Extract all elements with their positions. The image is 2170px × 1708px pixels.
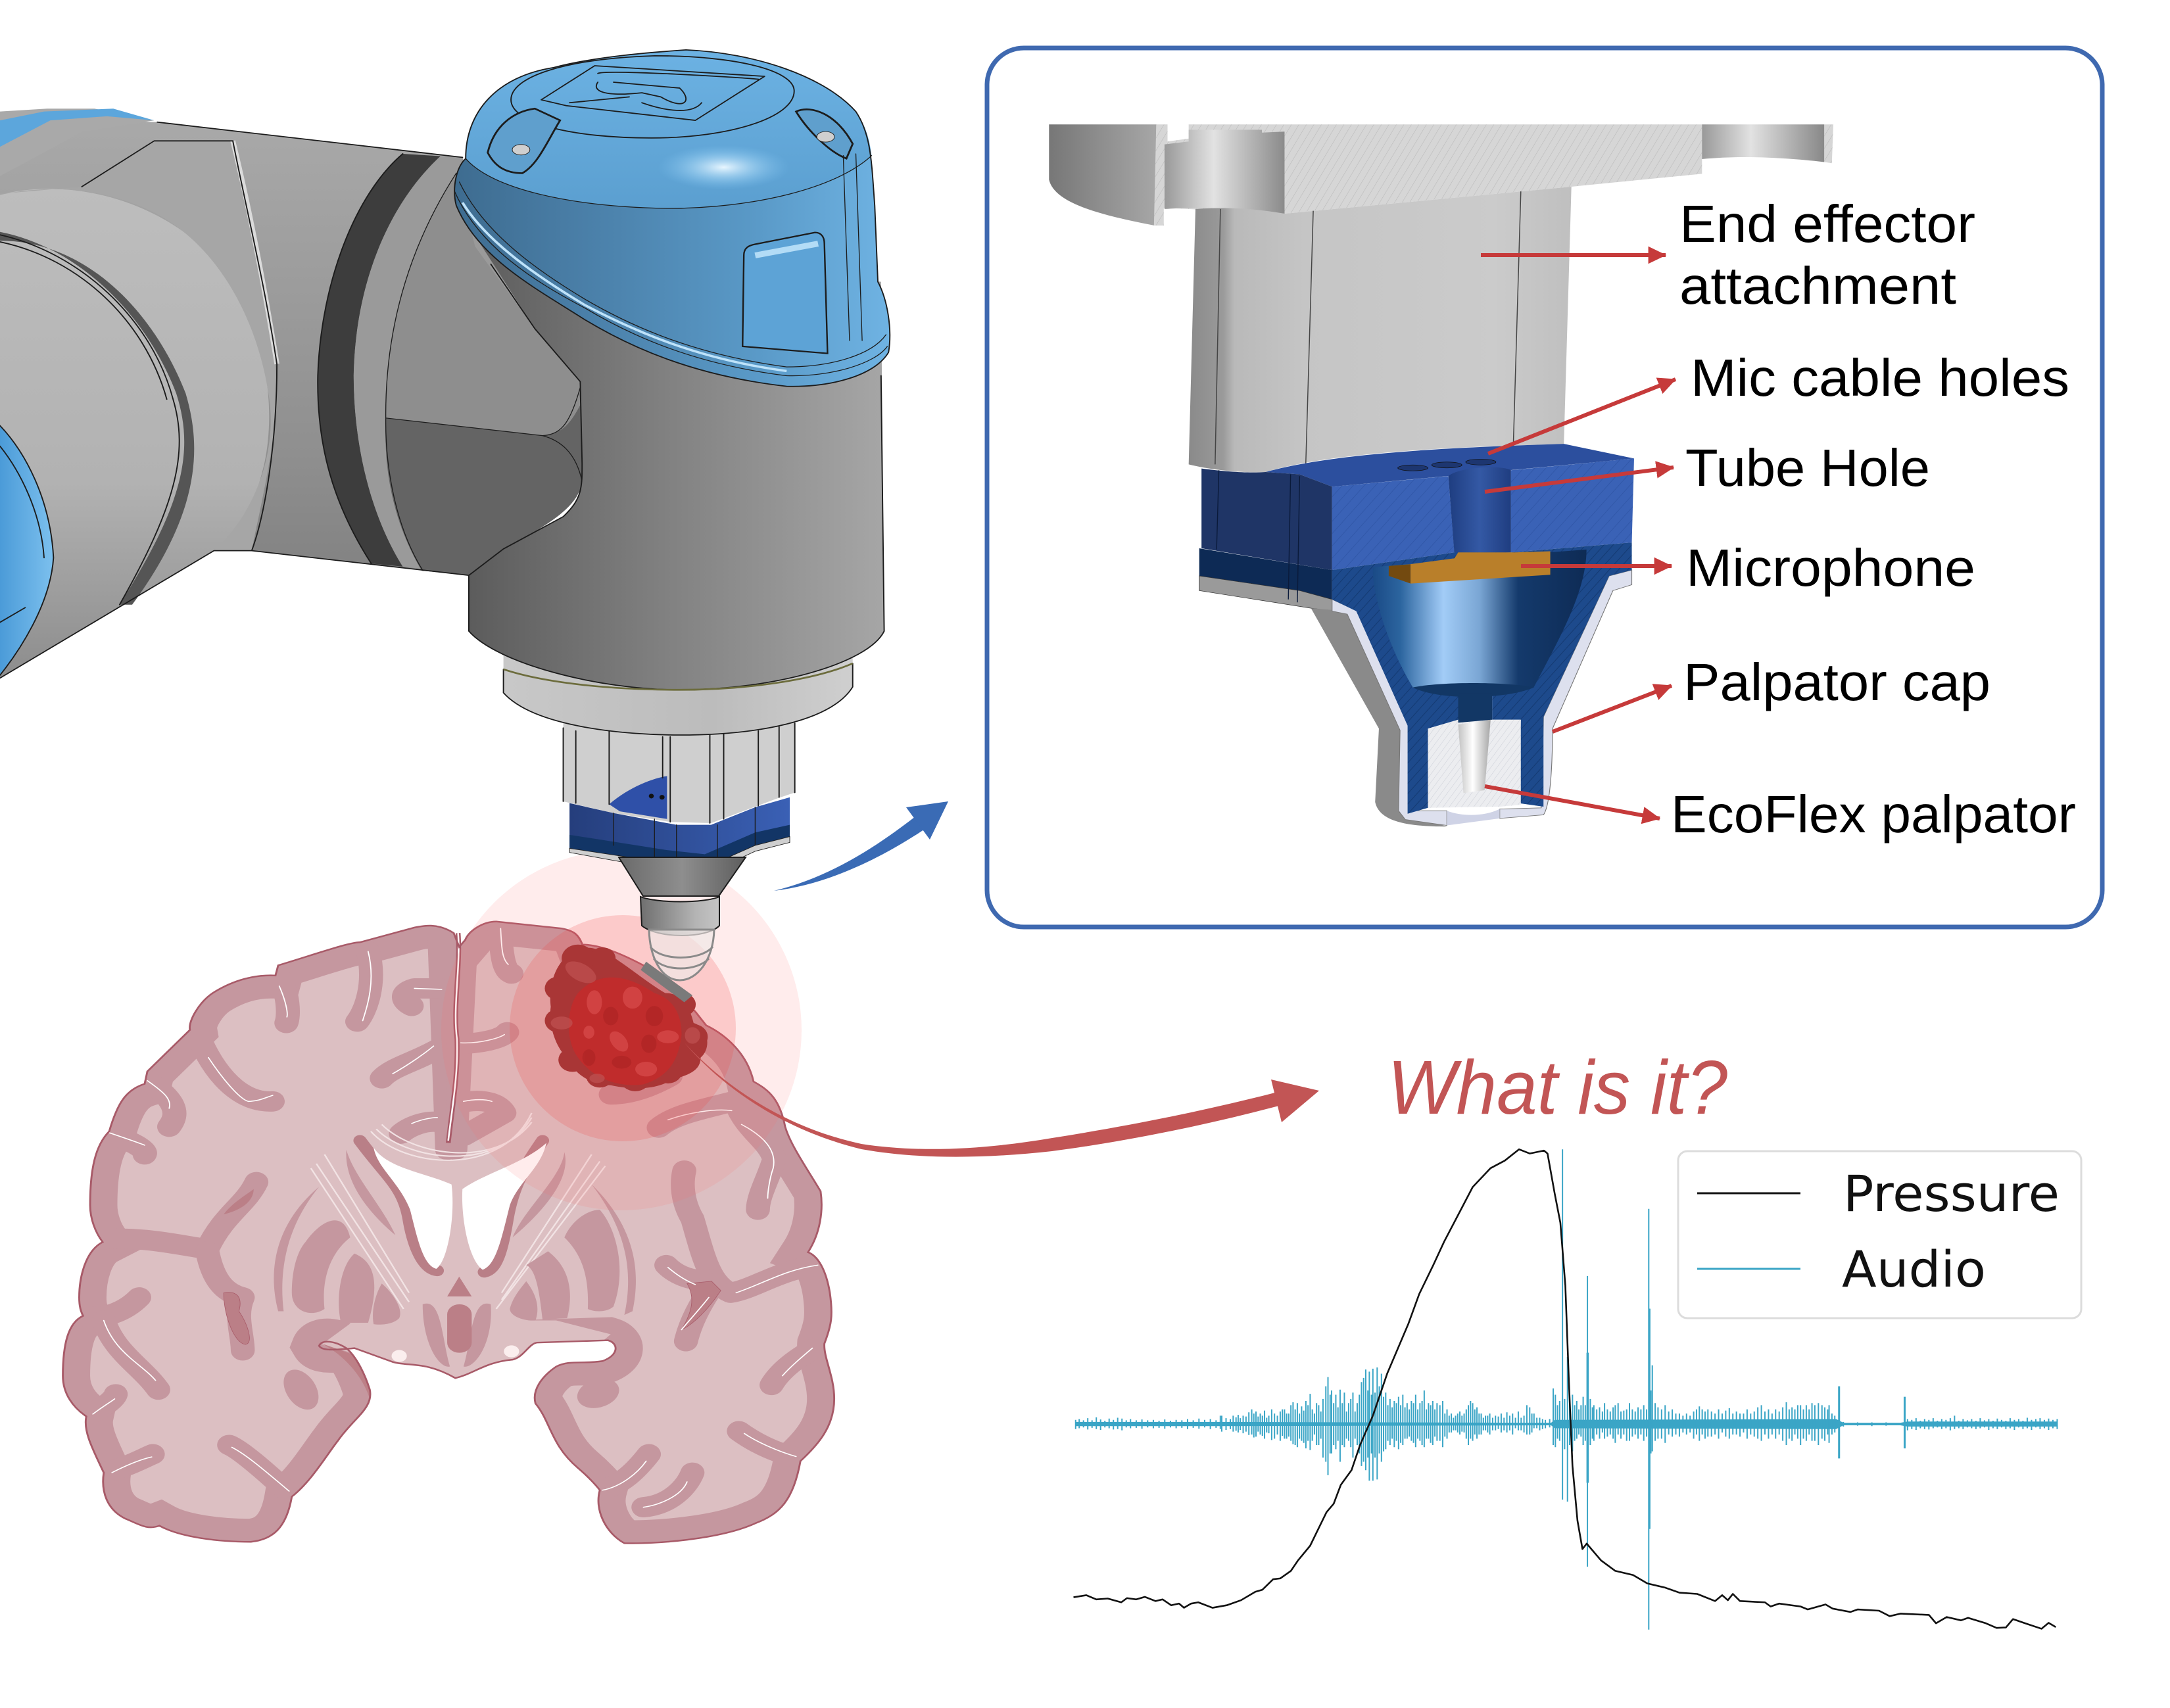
audio signal	[1076, 1149, 2057, 1630]
blue housing section	[1332, 542, 1632, 814]
cap exterior side	[1311, 608, 1447, 826]
palpator cone	[619, 857, 746, 896]
panel: end effector cross-section	[987, 48, 2102, 927]
tumor	[544, 945, 708, 1091]
upper arm link	[0, 118, 469, 678]
part labels: Palpator cap	[1683, 653, 1990, 711]
part labels: Mic cable holes	[1691, 348, 2069, 407]
cap screw right	[796, 109, 853, 158]
blue arrow to detail	[774, 801, 948, 891]
blue joint lower-left	[0, 425, 53, 675]
part labels: Microphone	[1686, 538, 1975, 597]
mounting flange	[1049, 124, 1833, 225]
sensor contact pad	[640, 962, 692, 1002]
outer glow circle	[441, 850, 802, 1210]
question text: What is it?	[1387, 1045, 1727, 1130]
dark seal ring left	[0, 232, 194, 605]
part labels: End effector	[1679, 195, 1975, 253]
part labels: attachment	[1679, 256, 1956, 315]
dark seal ring	[318, 154, 441, 567]
blue end-effector plate	[569, 797, 790, 868]
legend: Audio	[1842, 1240, 1986, 1298]
midline structures	[447, 1277, 471, 1353]
part labels	[1671, 195, 2076, 843]
blue mount top surface	[1266, 444, 1634, 486]
joint housing	[354, 156, 585, 575]
cap logo	[511, 56, 794, 138]
tumor lobes	[544, 945, 708, 1091]
brain coronal section	[63, 922, 834, 1544]
robot arm	[0, 50, 890, 980]
pressure curve	[1074, 1149, 2056, 1628]
red arrow to question	[684, 1042, 1319, 1157]
blue cap	[454, 50, 890, 387]
palpator tip	[649, 930, 714, 980]
inner glow circle	[510, 915, 736, 1141]
legend	[1678, 1151, 2081, 1318]
inner acoustic cavity	[1373, 550, 1587, 694]
leader arrows	[1481, 255, 1676, 818]
collar	[504, 640, 853, 735]
signal chart	[1074, 1149, 2081, 1630]
part labels: EcoFlex palpator	[1671, 785, 2076, 843]
microphone	[1389, 552, 1551, 584]
blue joint top-left	[0, 108, 154, 176]
ventricles	[360, 1141, 546, 1272]
cortex band and gyri	[63, 922, 834, 1544]
cap screw left	[488, 108, 560, 173]
palpator cylinder	[640, 897, 719, 936]
legend: Pressure	[1843, 1164, 2060, 1223]
corpus callosum fibres	[311, 1113, 605, 1309]
part labels: Tube Hole	[1685, 439, 1930, 497]
attachment bracket	[564, 705, 795, 823]
cut-away model	[1049, 124, 1833, 826]
deep nuclei	[274, 1150, 636, 1367]
EcoFlex palpator	[1428, 694, 1521, 808]
blue mount side	[1201, 469, 1332, 570]
attachment body	[1189, 187, 1572, 472]
cap window	[742, 233, 827, 354]
main head cylinder	[469, 241, 884, 690]
palpator cap section	[1332, 600, 1447, 826]
sulcus highlights	[93, 928, 818, 1507]
blue mount cut faces	[1332, 476, 1455, 570]
